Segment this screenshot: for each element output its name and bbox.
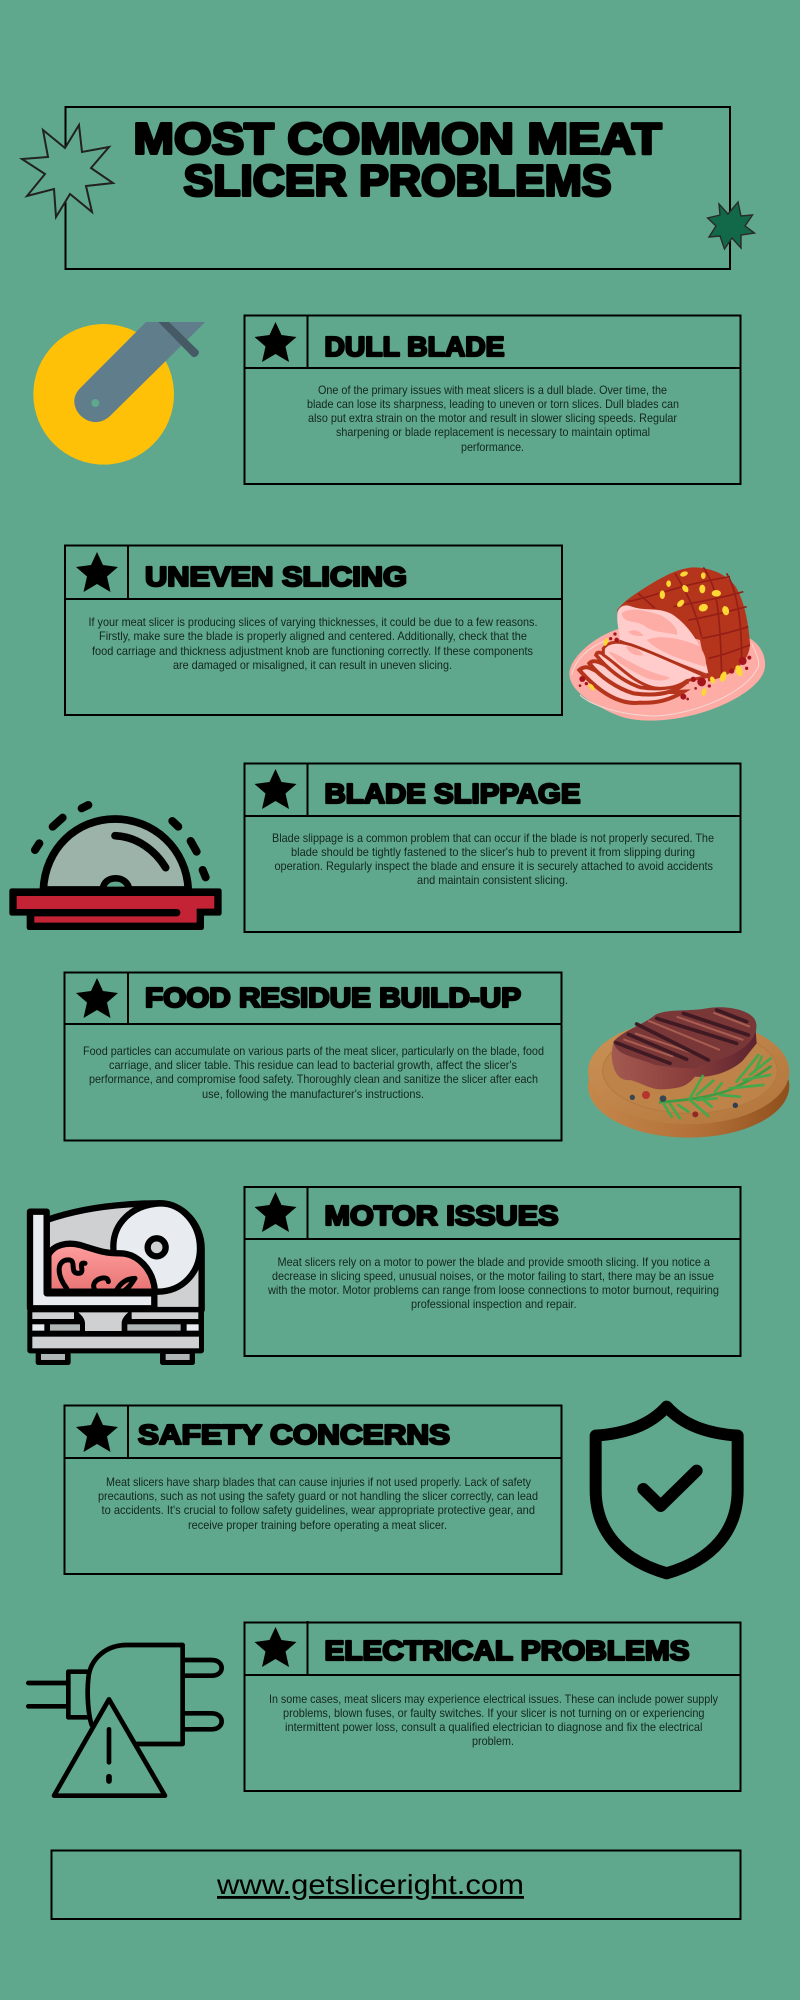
text block: One of the primary issues with meat slicers is a dull blade. Over time, the	[318, 383, 667, 397]
icon: star	[254, 769, 296, 809]
text block: Meat slicers have sharp blades that can cause injuries if not used properly. Lack of safety	[106, 1475, 531, 1489]
icon: star	[76, 1412, 118, 1452]
title: MOST COMMON MEAT	[134, 114, 662, 164]
text block	[83, 1044, 544, 1101]
title	[134, 114, 662, 206]
panel: blade slippage	[244, 763, 741, 932]
text block: If your meat slicer is producing slices of varying thicknesses, it could be due to a few reasons.	[88, 615, 538, 629]
text block: with the motor. Motor problems can range from loose connections to motor burnout, requiring	[267, 1283, 719, 1297]
panel: electrical problems	[244, 1621, 741, 1791]
text block: operation. Regularly inspect the blade and ensure it is securely attached to avoid accidents	[274, 859, 713, 873]
text block: In some cases, meat slicers may experience electrical issues. These can include power supply	[269, 1692, 718, 1706]
footer website panel	[52, 1850, 740, 1919]
website link text: www.getsliceright.com	[216, 1869, 524, 1900]
icon: star	[76, 552, 118, 592]
text block: problem.	[472, 1734, 514, 1748]
warning triangle	[54, 1699, 165, 1796]
text block: Blade slippage is a common problem that can occur if the blade is not properly secured. The	[272, 831, 714, 845]
text block: to accidents. It's crucial to follow safety guidelines, wear appropriate protective gear, and	[102, 1503, 535, 1517]
text block: problems, blown fuses, or faulty switches. If your slicer is not turning on or experiencing	[283, 1706, 704, 1720]
text block: intermittent power loss, consult a qualified electrician to diagnose and fix the electrical	[285, 1720, 702, 1734]
text block	[272, 831, 714, 887]
text block: blade can lose its sharpness, leading to uneven or torn slices. Dull blades can	[307, 397, 679, 411]
text block: Food particles can accumulate on various parts of the meat slicer, particularly on the blade, food	[83, 1044, 544, 1058]
heading: SAFETY CONCERNS	[138, 1419, 450, 1450]
text block	[98, 1475, 538, 1532]
text block: performance, and compromise food safety. Thoroughly clean and sanitize the slicer after each	[89, 1072, 538, 1086]
heading: DULL BLADE	[324, 331, 504, 362]
text block: also put extra strain on the motor and result in slower slicing speeds. Regular	[308, 411, 677, 425]
icon: star	[254, 322, 296, 362]
heading: FOOD RESIDUE BUILD-UP	[145, 982, 521, 1013]
icon: electric plug with warning triangle	[28, 1645, 222, 1796]
illustration: grilled steak on wooden board	[588, 1007, 789, 1138]
panel: motor issues	[244, 1186, 741, 1356]
icon: saw blade on red base	[9, 805, 222, 930]
icon: star	[254, 1627, 296, 1667]
text block: professional inspection and repair.	[411, 1297, 576, 1311]
icon: star	[76, 978, 118, 1018]
panel: safety concerns	[64, 1405, 562, 1574]
text block: Meat slicers rely on a motor to power the blade and provide smooth slicing. If you notice a	[278, 1255, 710, 1269]
icon: green starburst	[708, 202, 754, 249]
text block: food carriage and thickness adjustment knob are functioning correctly. If these components	[92, 644, 533, 658]
icon: meat slicer machine	[27, 1203, 204, 1365]
text block: are damaged or misaligned, it can result in uneven slicing.	[173, 658, 452, 672]
panel: dull blade	[244, 315, 741, 484]
text block: use, following the manufacturer's instructions.	[202, 1087, 424, 1101]
text block	[88, 615, 538, 672]
panel: uneven slicing	[64, 545, 562, 715]
text block: and maintain consistent slicing.	[417, 873, 568, 887]
text block: receive proper training before operating a meat slicer.	[188, 1518, 447, 1532]
text block: blade should be tightly fastened to the slicer's hub to prevent it from slipping during	[291, 845, 695, 859]
panel: food residue build-up	[64, 972, 562, 1140]
text block	[307, 383, 679, 454]
text block: Firstly, make sure the blade is properly aligned and centered. Additionally, check that the	[99, 629, 527, 643]
heading: MOTOR ISSUES	[324, 1200, 558, 1231]
title: SLICER PROBLEMS	[184, 156, 612, 206]
text block	[267, 1255, 719, 1311]
icon: knife on yellow circle	[33, 322, 205, 465]
text block: precautions, such as not using the safety guard or not handling the slicer correctly, can lead	[98, 1489, 538, 1503]
heading: ELECTRICAL PROBLEMS	[324, 1635, 690, 1666]
text block: performance.	[461, 440, 524, 454]
icon: shield with check mark	[596, 1407, 738, 1573]
heading: UNEVEN SLICING	[145, 561, 407, 592]
title frame	[66, 107, 730, 269]
text block: carriage, and slicer table. This residue can lead to bacterial growth, affect the slicer's	[109, 1058, 517, 1072]
illustration: sliced ham on plate	[569, 567, 765, 721]
text block: sharpening or blade replacement is necessary to maintain optimal	[336, 425, 650, 439]
text block	[269, 1692, 718, 1748]
heading: BLADE SLIPPAGE	[324, 778, 580, 809]
icon: star	[254, 1192, 296, 1232]
title panel	[22, 107, 754, 269]
icon: outline starburst	[22, 125, 113, 217]
text block: decrease in slicing speed, unusual noises, or the motor failing to start, there may be an issue	[272, 1269, 714, 1283]
